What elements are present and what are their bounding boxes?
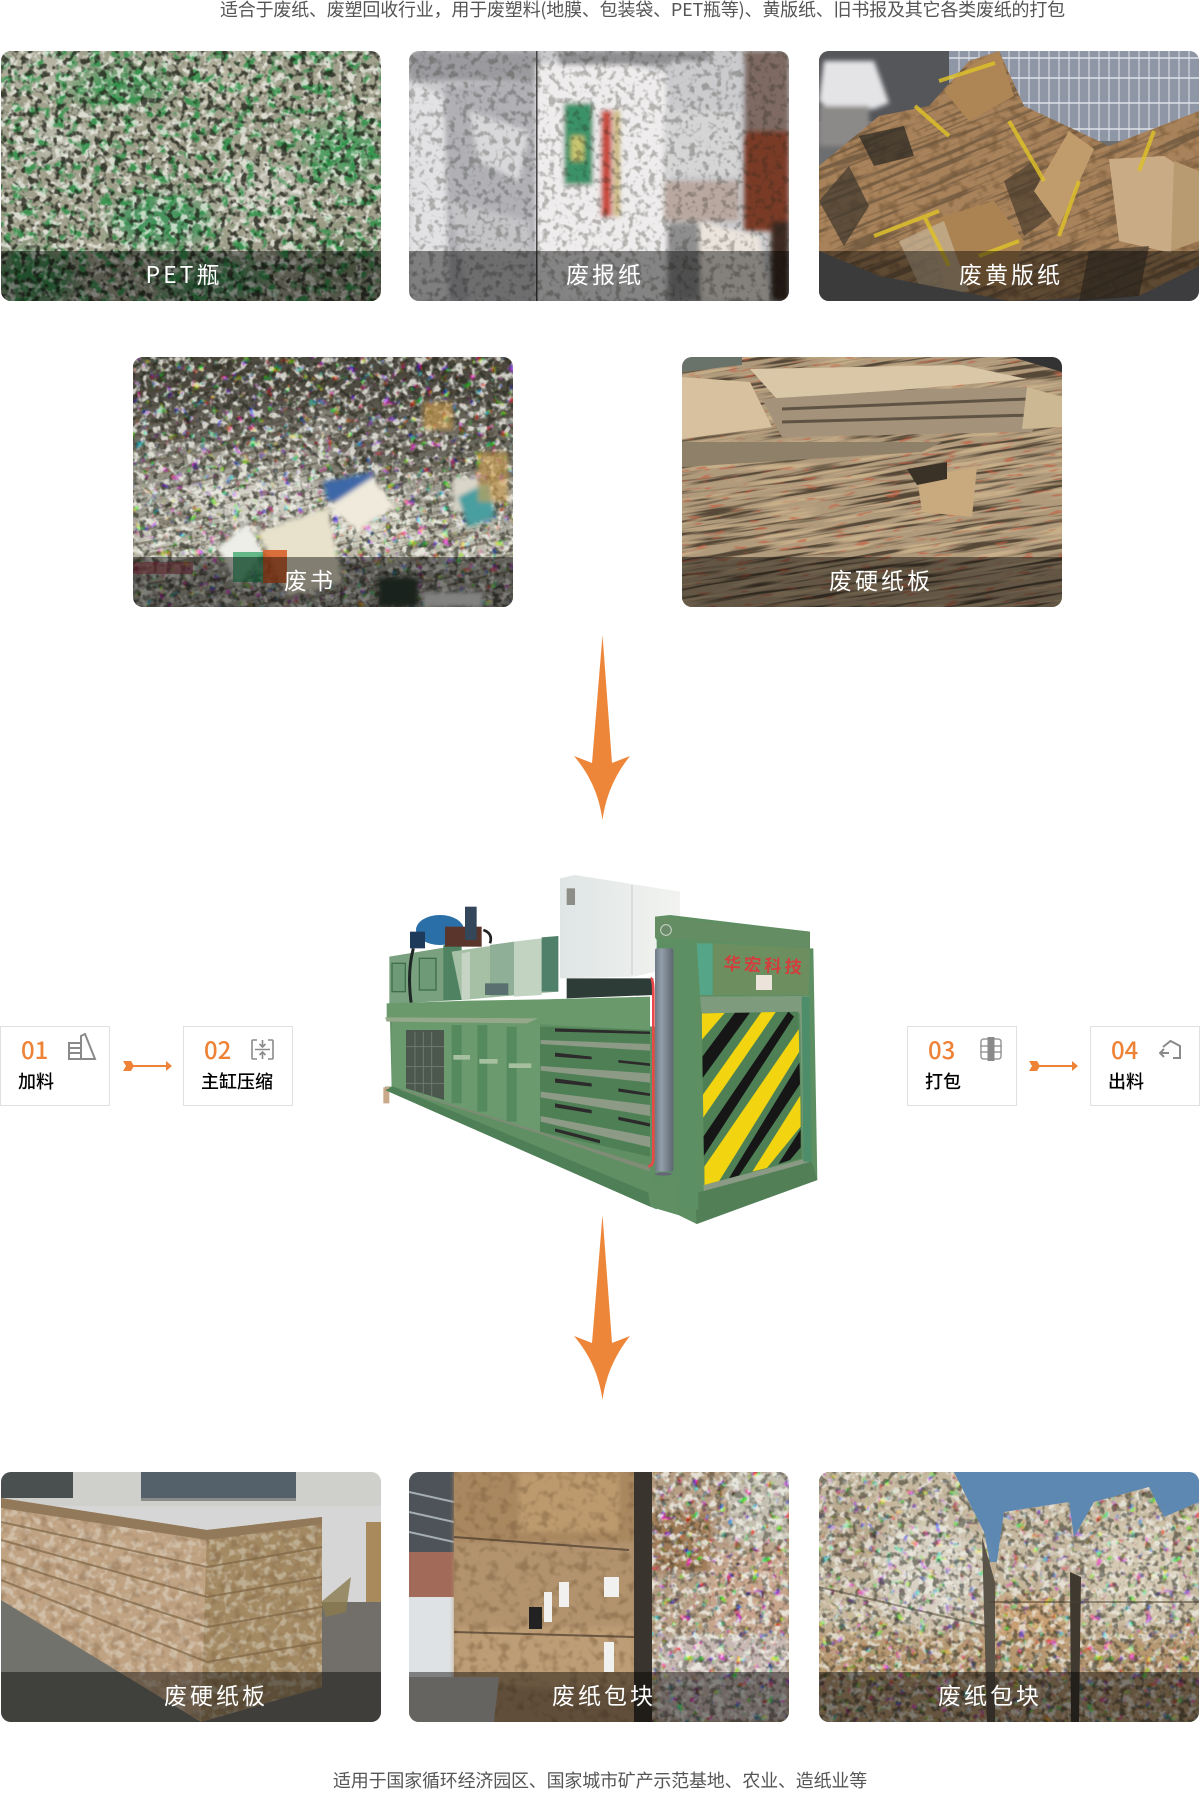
arrow: down to baler [574,635,630,820]
caption bar: 废纸包块 [938,1677,1042,1711]
main body [383,997,657,1209]
photo: paper bales indoors [409,1472,789,1722]
icon: compression [251,1039,274,1060]
panel: PET瓶 input material [1,51,381,301]
photo: PET bottles [1,51,381,301]
step number: 03 [928,1031,955,1066]
step label: 出料 [1108,1068,1144,1094]
caption bar [409,1672,789,1722]
icon: output house arrow [1159,1040,1181,1059]
control cabinet [560,875,680,978]
icon: strapped bale [980,1037,1002,1061]
panel: 废黄版纸 input material [819,51,1199,301]
caption bar [819,1672,1199,1722]
press slats [540,1027,650,1157]
step number: 02 [204,1031,231,1066]
arrow: step 03 to 04 [1029,1061,1078,1071]
hydraulic motor and tank [389,907,558,1017]
icon: material pile [68,1033,96,1060]
step number: 01 [21,1031,48,1066]
arrow: step 01 to 02 [123,1061,172,1071]
panel: 废报纸 input material [409,51,789,301]
step 04: discharge [1090,1026,1200,1106]
panel: 废书 input material [133,357,513,607]
caption bar: 废黄版纸 [959,256,1063,290]
step label: 主缸压缩 [201,1068,273,1094]
photo: waste newspaper rolls [409,51,789,301]
step label: 打包 [925,1068,961,1094]
panel: 废硬纸板 input material [682,357,1062,607]
caption bar: 废硬纸板 [164,1677,268,1711]
photo: yellow cardboard pile [819,51,1199,301]
caption bar: PET瓶 [146,256,222,290]
panel: 废纸包块 output bale A [409,1472,789,1722]
step 03: baling [907,1026,1017,1106]
hoses behind frame [567,978,653,998]
step number: 04 [1111,1031,1138,1066]
bottom application text: 适用于国家循环经济园区、国家城市矿产示范基地、农业、造纸业等 [333,1767,867,1793]
caption bar: 废报纸 [566,256,644,290]
caption bar [682,557,1062,607]
step 02: main cylinder compression [183,1026,293,1106]
arrow: down to output bales [574,1216,630,1400]
hazard stripes panel [700,1010,803,1187]
caption bar [409,251,789,301]
caption bar: 废纸包块 [552,1677,656,1711]
caption bar [1,1672,381,1722]
baler machine image [383,875,818,1224]
panel: 废纸包块 output bale B [819,1472,1199,1722]
photo: cardboard bale [1,1472,381,1722]
brand text: 华宏科技 [723,949,806,979]
photo: stacked corrugated cardboard [682,357,1062,607]
press frame [648,915,817,1224]
photo: waste books pile [133,357,513,607]
hydraulic cylinder [648,925,678,1215]
caption bar [133,557,513,607]
caption bar: 废书 [284,562,336,596]
panel: 废硬纸板 output bale [1,1472,381,1722]
caption bar: 废硬纸板 [829,562,933,596]
caption bar [1,251,381,301]
step label: 加料 [18,1068,54,1094]
caption bar [819,251,1199,301]
step 01: feeding [0,1026,110,1106]
photo: paper bales under sky [819,1472,1199,1722]
